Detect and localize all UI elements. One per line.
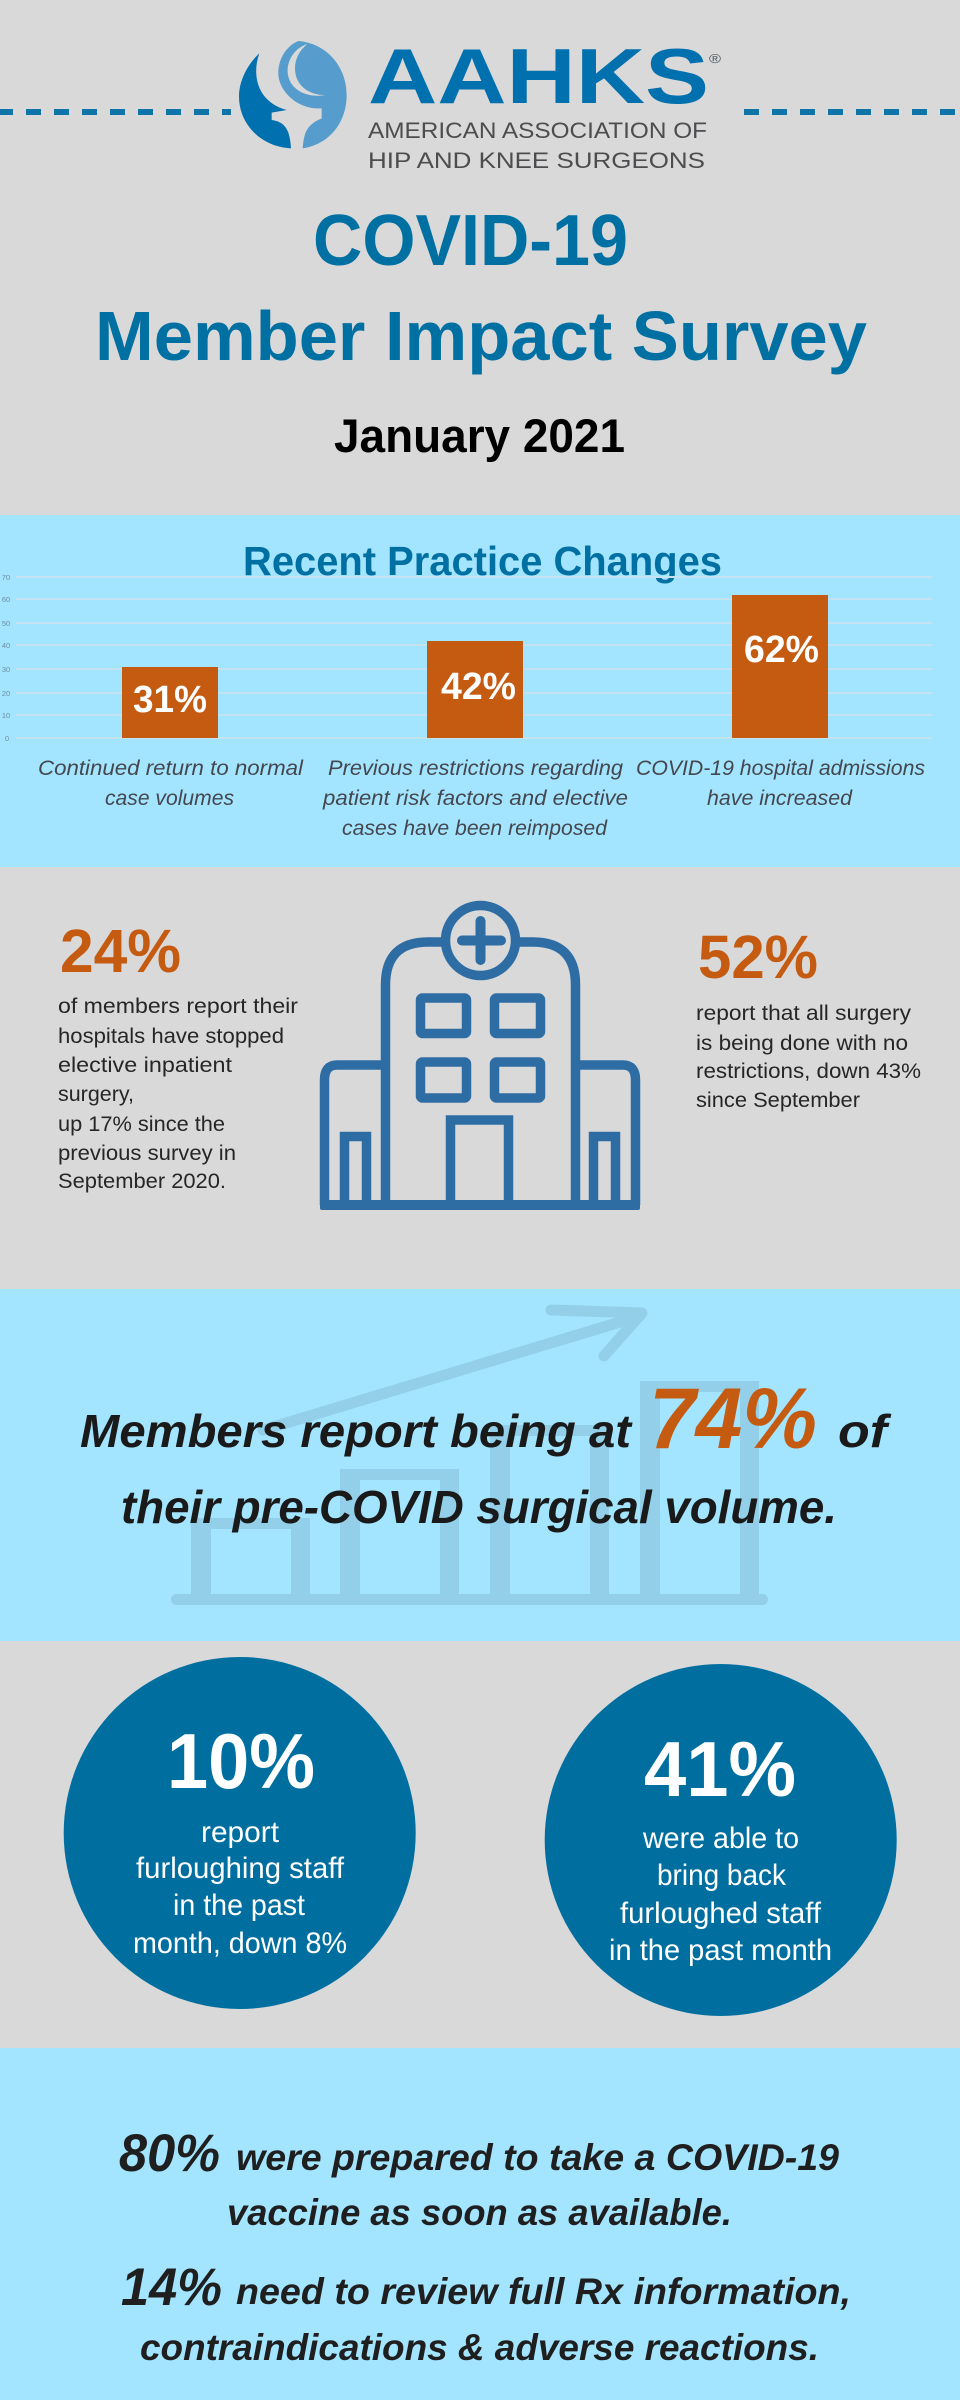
registered mark: ® xyxy=(709,51,722,66)
text: elective surgery stopped: elective inpatient xyxy=(58,1053,232,1077)
bar: 62% xyxy=(732,595,828,738)
circle: 10% furloughing: in the past xyxy=(173,1889,306,1922)
text: no restrictions: restrictions, down 43% xyxy=(696,1059,921,1083)
caption: hospital admissions: have increased xyxy=(707,786,853,810)
axis labels: 20 xyxy=(2,689,10,698)
bar: 42% xyxy=(427,641,523,738)
title line 1: COVID-19 xyxy=(313,201,628,281)
bar: 62%: 62% xyxy=(744,629,819,671)
panel: header xyxy=(0,0,960,515)
stat: 74%: 74% xyxy=(649,1371,817,1467)
circle: 41% brought back: in the past month xyxy=(609,1934,832,1967)
caption: restrictions reimposed: Previous restrictions regarding xyxy=(328,756,623,780)
caption: restrictions reimposed: patient risk factors and elective xyxy=(322,786,628,810)
logo tagline line 2: HIP AND KNEE SURGEONS xyxy=(368,148,705,173)
text: elective surgery stopped: surgery, xyxy=(58,1082,134,1106)
statement line 1: of xyxy=(838,1405,892,1457)
axis labels: 10 xyxy=(2,711,10,720)
axis labels: 70 xyxy=(2,573,10,582)
caption: restrictions reimposed: cases have been reimposed xyxy=(342,816,608,840)
circle: 10% furloughing: report xyxy=(201,1816,280,1849)
bar: 31% xyxy=(122,667,218,738)
caption: hospital admissions xyxy=(636,756,925,810)
statement line 1 xyxy=(80,1371,892,1467)
panel: surgical volume xyxy=(0,1289,960,1641)
dashed line right xyxy=(744,109,960,115)
statement: 14% need information: contraindications & adverse reactions. xyxy=(140,2327,819,2368)
statement line 1: Members report being at xyxy=(80,1405,633,1457)
text: no restrictions: is being done with no xyxy=(696,1031,908,1055)
stat: 24%: 24% xyxy=(60,917,181,985)
statement: 80% prepared: 80% xyxy=(119,2124,220,2183)
text: elective surgery stopped: September 2020. xyxy=(58,1169,226,1193)
text: no restrictions: report that all surgery xyxy=(696,1001,911,1025)
icon: ghost growth chart xyxy=(171,1310,768,1605)
statement: 14% need information: 14% xyxy=(121,2258,222,2317)
caption: restrictions reimposed xyxy=(322,756,628,840)
icon: hospital xyxy=(320,906,640,1210)
text: no restrictions xyxy=(696,1001,921,1112)
text: no restrictions: since September xyxy=(696,1088,860,1112)
axis labels: 60 xyxy=(2,595,10,604)
axis labels: 0 xyxy=(5,734,9,743)
text: elective surgery stopped: of members report their xyxy=(58,994,298,1018)
circle: 41% brought back: 41% xyxy=(644,1725,796,1813)
panel: recent practice changes xyxy=(0,515,960,867)
text: elective surgery stopped: hospitals have stopped xyxy=(58,1024,284,1048)
text: elective surgery stopped: previous survey in xyxy=(58,1141,236,1165)
date: January 2021 xyxy=(334,409,625,462)
caption: normal case volumes xyxy=(38,756,304,810)
statement: 80% prepared: vaccine as soon as available. xyxy=(227,2192,732,2233)
axis labels xyxy=(2,573,10,743)
circle: 41% brought back: bring back xyxy=(657,1859,787,1892)
dashed line left xyxy=(0,109,231,115)
logo wordmark: AAHKS xyxy=(368,32,709,120)
axis labels: 50 xyxy=(2,619,10,628)
bar: 31%: 31% xyxy=(133,679,207,721)
heading: Recent Practice Changes xyxy=(243,538,722,584)
axis labels: 30 xyxy=(2,665,10,674)
circle: 41% brought back: were able to xyxy=(642,1822,799,1855)
text: elective surgery stopped: up 17% since the xyxy=(58,1112,225,1136)
caption: normal case volumes: Continued return to normal xyxy=(38,756,304,780)
statement: 14% need information: need to review full Rx information, xyxy=(236,2271,851,2312)
icon: AAHKS logo emblem xyxy=(239,41,347,148)
circle: 10% furloughing: furloughing staff xyxy=(136,1852,345,1885)
circle: 10% furloughing: month, down 8% xyxy=(133,1927,347,1960)
statement: 80% prepared: were prepared to take a COVID-19 xyxy=(236,2137,839,2178)
statement line 2: their pre-COVID surgical volume. xyxy=(121,1481,837,1533)
caption: hospital admissions: COVID-19 hospital admissions xyxy=(636,756,925,780)
circle: 41% brought back: furloughed staff xyxy=(620,1897,822,1930)
statement: 80% prepared xyxy=(119,2124,839,2233)
panel: furlough statistics xyxy=(0,1641,960,2048)
statement: 14% need information xyxy=(121,2258,851,2368)
caption: normal case volumes: case volumes xyxy=(105,786,234,810)
panel: hospital statistics xyxy=(0,867,960,1289)
axis labels: 40 xyxy=(2,641,10,650)
circle: 41% brought back xyxy=(545,1664,897,2016)
stat: 52%: 52% xyxy=(698,923,818,991)
bar chart xyxy=(2,573,932,743)
circle: 10% furloughing: 10% xyxy=(167,1717,315,1805)
bar: 42%: 42% xyxy=(441,666,516,708)
text: elective surgery stopped xyxy=(58,994,298,1193)
title line 2: Member Impact Survey xyxy=(95,297,867,375)
circle: 10% furloughing xyxy=(64,1657,416,2009)
logo tagline line 1: AMERICAN ASSOCIATION OF xyxy=(368,118,707,143)
panel: vaccine xyxy=(0,2048,960,2400)
